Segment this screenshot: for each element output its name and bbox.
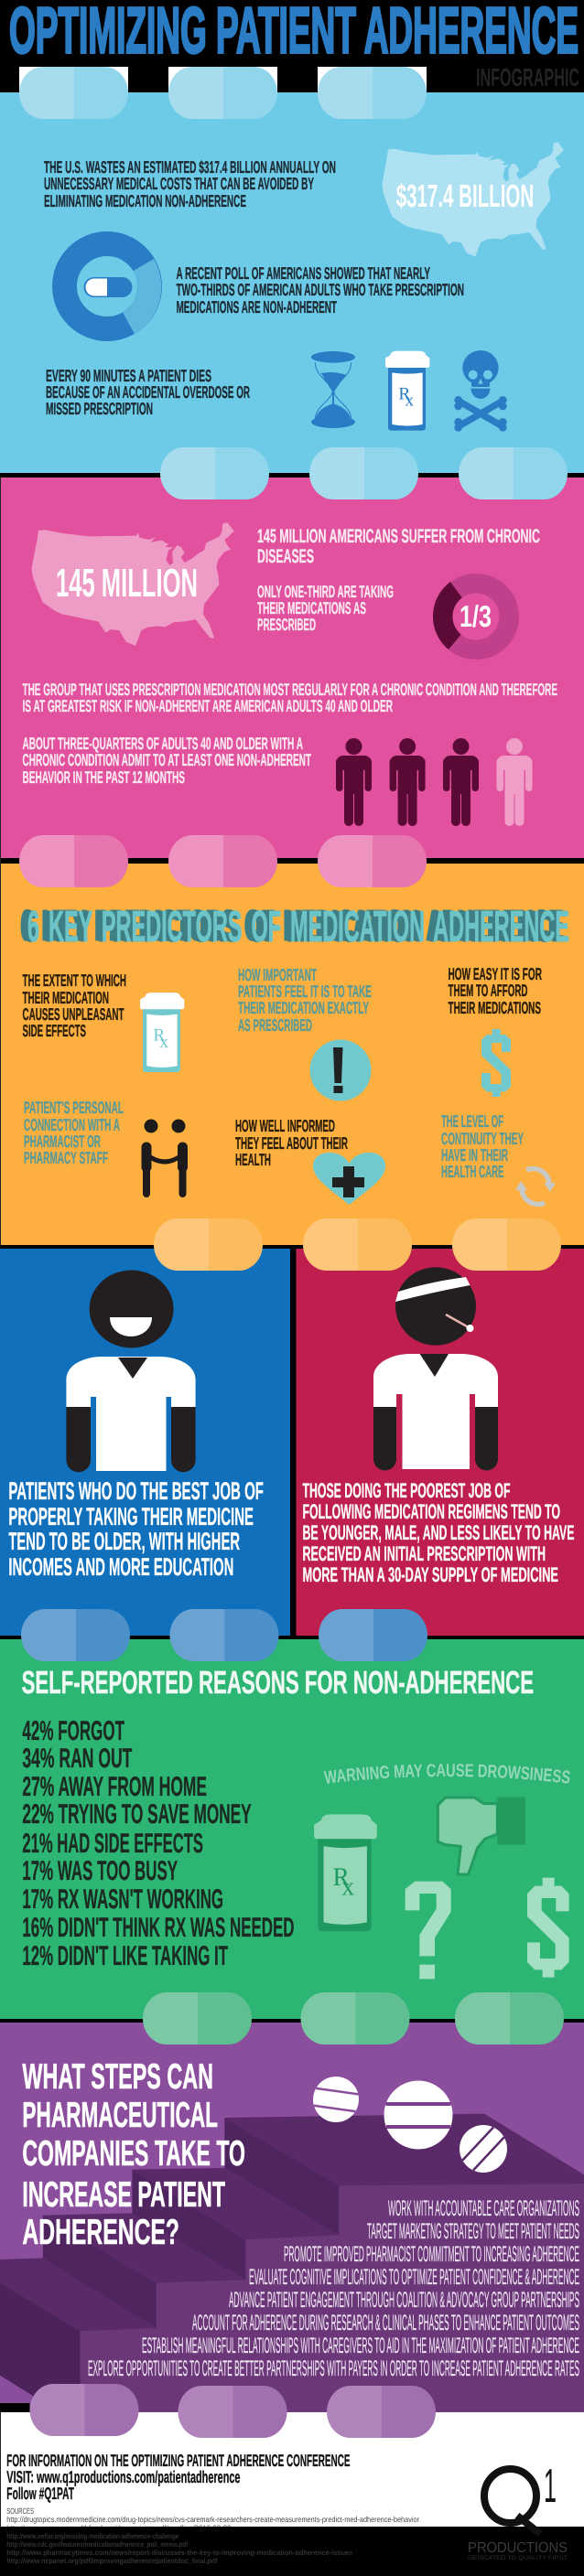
panel: key predictors xyxy=(0,478,584,1245)
icon: teal bottle: R xyxy=(153,1025,165,1045)
icon: prescription bottle xyxy=(385,351,429,431)
text: side effects xyxy=(22,971,126,1040)
text: best job: TEND TO BE OLDER, WITH HIGHER xyxy=(8,1528,240,1555)
pills row: blue bottom xyxy=(160,447,568,499)
list: steps xyxy=(88,2196,579,2381)
text: importance: PATIENTS FEEL IT IS TO TAKE xyxy=(238,982,372,1001)
panel: poorest adherents xyxy=(297,1249,584,1636)
band xyxy=(0,858,584,864)
pills row: purple bottom xyxy=(29,2384,436,2438)
curved warning text: WARNING MAY CAUSE DROWSINESS xyxy=(324,1764,570,1784)
panel: steps xyxy=(0,2023,584,2412)
panel: self-reported reasons xyxy=(0,1609,584,2019)
text: personal connection: PATIENT'S PERSONAL xyxy=(24,1098,124,1117)
text: three-quarters: CHRONIC CONDITION ADMIT TO AT LEAST ONE NON-ADHERENT xyxy=(22,750,311,769)
text: personal connection: PHARMACIST OR xyxy=(24,1132,101,1151)
logo: Q1 Productions: 1 xyxy=(544,2460,557,2513)
text: importance xyxy=(238,965,372,1035)
text: three-quarters: BEHAVIOR IN THE PAST 12 MONTHS xyxy=(22,767,185,787)
band xyxy=(0,473,584,478)
text: wasted cost: UNNECESSARY MEDICAL COSTS THAT CAN BE AVOIDED BY xyxy=(44,174,314,193)
icon: teal bottle: x xyxy=(159,1032,168,1051)
text: best job: PROPERLY TAKING THEIR MEDICINE xyxy=(8,1503,254,1530)
icon: heart with cross xyxy=(313,1153,385,1205)
text: sources: http://www.ncpanet.org/pdf/improvingadherencepatientdoc_final.pdf xyxy=(6,2557,218,2565)
heading: what steps: WHAT STEPS CAN xyxy=(22,2057,213,2097)
text: continuity: THE LEVEL OF xyxy=(441,1111,503,1131)
icon: green bottle: x xyxy=(341,1872,354,1901)
text: group at risk xyxy=(22,680,557,715)
text: wasted cost: THE U.S. WASTES AN ESTIMATED $317.4 BILLION ANNUALLY ON xyxy=(44,157,336,177)
text: informed xyxy=(235,1116,348,1169)
icon: US map with 145 million xyxy=(32,522,234,646)
icon row: three of four people xyxy=(336,738,533,826)
icon: handshake xyxy=(145,1120,185,1194)
list: reasons xyxy=(22,1716,295,1971)
text: sources: SOURCES xyxy=(6,2506,34,2516)
text: best job: PATIENTS WHO DO THE BEST JOB OF xyxy=(8,1477,264,1505)
icon: green bottle: R xyxy=(332,1862,350,1891)
text: sources: http://www.cdc.gov/features/medicationadherence_poll_memo.pdf xyxy=(6,2540,189,2549)
text: best job: INCOMES AND MORE EDUCATION xyxy=(8,1553,233,1581)
icon: tablet small xyxy=(313,2077,359,2122)
list: reasons: 34% RAN OUT xyxy=(22,1744,132,1774)
text: side effects: THE EXTENT TO WHICH xyxy=(22,971,126,990)
text: wasted cost xyxy=(44,157,336,210)
icon: prescription bottle: R xyxy=(398,383,410,403)
icon: tablet diagonal xyxy=(460,2125,507,2173)
text: cut-off source line: http://www.commonwealthfund.org/drug-pricing-pdf/medline/2013-08-28 xyxy=(6,2524,232,2532)
icon: sick patient xyxy=(373,1267,498,1471)
icon: teal bottle xyxy=(140,993,184,1072)
icon: hourglass xyxy=(311,351,355,428)
panel: footer xyxy=(0,2384,584,2576)
header band xyxy=(0,0,584,92)
text: personal connection xyxy=(24,1098,124,1167)
band xyxy=(0,2019,584,2023)
text: continuity: HAVE IN THEIR xyxy=(441,1145,508,1165)
text: importance: AS PRESCRIBED xyxy=(238,1015,312,1035)
staircase xyxy=(0,2114,584,2412)
text: continuity: HEALTH CARE xyxy=(441,1162,503,1181)
list: reasons: 42% FORGOT xyxy=(22,1716,124,1746)
pill backing corners xyxy=(19,67,427,92)
text: side effects: CAUSES UNPLEASANT xyxy=(22,1004,124,1024)
text: three-quarters xyxy=(22,734,311,787)
band xyxy=(0,1245,584,1639)
panel: chronic disease xyxy=(0,447,584,858)
list: reasons: 27% AWAY FROM HOME xyxy=(22,1772,207,1802)
icon: dollar xyxy=(481,1029,511,1097)
list: reasons: 17% WAS TOO BUSY xyxy=(22,1856,178,1886)
text: sources xyxy=(6,2506,419,2565)
chart: one third donut: 1/3 xyxy=(460,599,492,633)
text: informed: HEALTH xyxy=(235,1150,271,1169)
icon: refresh arrows xyxy=(515,1169,556,1204)
heading: what steps: INCREASE PATIENT xyxy=(22,2175,225,2215)
heading: what steps: COMPANIES TAKE TO xyxy=(22,2134,245,2174)
text: conference info: Follow #Q1PAT xyxy=(6,2484,74,2503)
text: informed: HOW WELL INFORMED xyxy=(235,1116,335,1135)
text: poll xyxy=(176,263,464,317)
text: sources: http://www.pharmacytimes.com/news/report-discusses-the-key-to-improving-medication-adherence-issues xyxy=(6,2549,353,2557)
chart: two-thirds donut xyxy=(64,243,161,334)
text: personal connection: CONNECTION WITH A xyxy=(24,1115,120,1134)
chart: one third donut xyxy=(433,582,509,649)
icon: happy patient xyxy=(66,1270,196,1472)
heading: what steps: ADHERENCE? xyxy=(22,2213,179,2252)
text: continuity xyxy=(441,1111,524,1181)
list: reasons: 22% TRYING TO SAVE MONEY xyxy=(22,1799,252,1830)
icon: skull and crossbones xyxy=(454,350,507,432)
list: reasons: 12% DIDN'T LIKE TAKING IT xyxy=(22,1941,228,1971)
text: personal connection: PHARMACY STAFF xyxy=(24,1148,108,1167)
text: conference info xyxy=(6,2451,350,2503)
panel: cost of non-adherence xyxy=(0,67,584,473)
icon: tablet large xyxy=(384,2080,452,2150)
icon: green bottle xyxy=(314,1814,377,1931)
icon: exclamation xyxy=(309,1039,372,1101)
pills row: orange bottom xyxy=(154,1218,561,1271)
icon: prescription bottle: x xyxy=(405,390,414,410)
panel: best adherents xyxy=(0,1249,290,1636)
text: overdose: BECAUSE OF AN ACCIDENTAL OVERDOSE OR xyxy=(46,382,250,402)
icon: question mark xyxy=(406,1882,451,1979)
icon: dollar sign xyxy=(527,1878,569,1978)
icon: US map with 145 million: 145 MILLION xyxy=(56,562,198,606)
text: three-quarters: ABOUT THREE-QUARTERS OF ADULTS 40 AND OLDER WITH A xyxy=(22,734,303,753)
text: side effects: SIDE EFFECTS xyxy=(22,1021,86,1040)
text: importance: THEIR MEDICATION EXACTLY xyxy=(238,998,369,1017)
pills row: green bottom xyxy=(143,1992,564,2045)
logo: Q1 Productions: PRODUCTIONS xyxy=(468,2540,568,2556)
list: reasons: 21% HAD SIDE EFFECTS xyxy=(22,1829,203,1859)
list: reasons: 16% DIDN'T THINK RX WAS NEEDED xyxy=(22,1913,295,1943)
text: sources: http://drugtopics.modernmedicine.com/drug-topics/news/cvs-caremark-researchers-create-measurements-predict-med-adherence-behavior xyxy=(6,2515,419,2524)
logo: Q1 Productions xyxy=(468,2460,568,2561)
text: one third: THEIR MEDICATIONS AS xyxy=(257,598,366,617)
logo: Q1 Productions: DEDICATED TO QUALITY FIRST xyxy=(468,2555,568,2561)
text: wasted cost: ELIMINATING MEDICATION NON-ADHERENCE xyxy=(44,191,246,210)
text: affordability xyxy=(449,964,542,1017)
text: overdose: MISSED PRESCRIPTION xyxy=(46,399,153,418)
pills row: blue bottom xyxy=(21,1609,427,1661)
text: conference info: VISIT: www.q1productions.com/patientadherence xyxy=(6,2467,240,2486)
pills row: pink bottom xyxy=(19,835,427,887)
pills row: top xyxy=(19,67,427,119)
text: side effects: THEIR MEDICATION xyxy=(22,988,109,1007)
text: poorest job xyxy=(302,1479,575,1586)
heading: what steps: PHARMACEUTICAL xyxy=(22,2096,218,2135)
heading: what steps xyxy=(22,2057,245,2252)
text: best job xyxy=(8,1477,264,1581)
text: one third: PRESCRIBED xyxy=(257,615,316,634)
icon: US map with cost xyxy=(382,142,564,257)
text: overdose xyxy=(46,366,250,418)
text: one third xyxy=(257,582,394,634)
text: informed: THEY FEEL ABOUT THEIR xyxy=(235,1133,348,1153)
text: chronic heading: DISEASES xyxy=(257,546,314,567)
text: importance: HOW IMPORTANT xyxy=(238,965,317,984)
text: overdose: EVERY 90 MINUTES A PATIENT DIES xyxy=(46,366,211,385)
text: sources: http://www.nefiar.org/missing-medication-adherence-challenge xyxy=(6,2532,179,2540)
text: one third: ONLY ONE-THIRD ARE TAKING xyxy=(257,582,394,601)
text: chronic heading xyxy=(257,526,540,567)
icon: thumbs down xyxy=(438,1797,525,1874)
list: reasons: 17% RX WASN'T WORKING xyxy=(22,1884,223,1915)
text: poll: MEDICATIONS ARE NON-ADHERENT xyxy=(176,297,337,317)
